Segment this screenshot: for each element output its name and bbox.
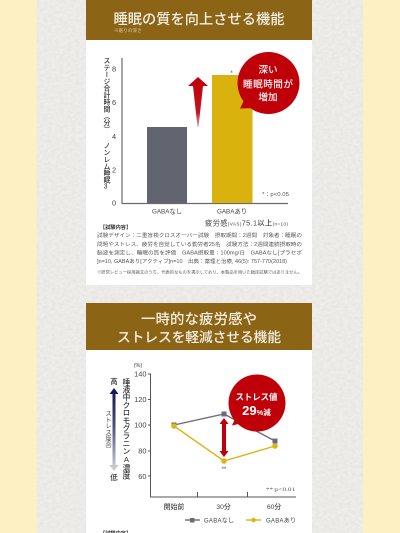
study details: 脳波を測定し、睡眠の質を評価 GABA摂取量：100mg/日 GABAなし[プラセボ xyxy=(97,250,302,256)
panel: sleep quality xyxy=(86,0,312,285)
y axis ticks: 0 xyxy=(112,198,116,208)
y axis ticks: 60 xyxy=(138,472,146,481)
y axis ticks: 6 xyxy=(112,98,116,107)
header: sleep quality xyxy=(86,0,312,40)
significance mark: * xyxy=(230,71,233,77)
significance mark: ** xyxy=(222,467,227,473)
arrow: difference xyxy=(220,418,228,457)
series: GABA xyxy=(171,423,278,464)
axes xyxy=(148,374,296,497)
header: sleep quality: ※眠りの深さ xyxy=(114,27,142,34)
y axis ticks: 100 xyxy=(134,420,146,430)
x axis labels: 60分 xyxy=(267,502,281,511)
study details: ※研究レビュー採用論文のうち、代表的なものを掲示しており、本製品を用いた臨床試験ではありません。 xyxy=(97,268,302,274)
line chart: chromogranin A xyxy=(134,363,296,524)
callout: deep sleep increase: 深い xyxy=(258,64,278,76)
callout: deep sleep increase: 睡眠時間が xyxy=(243,78,293,90)
bar: GABA none xyxy=(147,127,187,203)
significance note: *：p<0.05 xyxy=(262,192,289,198)
y axis ticks: 4 xyxy=(112,132,116,141)
y axis ticks: 80 xyxy=(138,446,146,456)
callout: stress reduction xyxy=(228,374,286,432)
y axis ticks xyxy=(134,370,146,481)
study details: 問題やストレス、疲労を自覚している勤労者25名 試験方法：2週間連続摂取時の xyxy=(97,241,302,248)
stress scale xyxy=(110,376,118,482)
header: stress and fatigue: ストレスを軽減させる機能 xyxy=(117,329,281,345)
legend: GABAあり xyxy=(266,518,296,524)
bar chart: sleep time xyxy=(112,52,300,216)
callout: deep sleep increase xyxy=(238,52,300,114)
header: stress and fatigue: 一時的な疲労感や xyxy=(141,310,257,328)
fatigue note: 疲労感(VAS)75.1以上(n=10) xyxy=(205,218,288,228)
callout: stress reduction: ストレス値 xyxy=(236,392,278,402)
x axis labels xyxy=(164,502,281,511)
panel: stress and fatigue xyxy=(86,303,312,533)
x axis labels: 開始前 xyxy=(164,502,184,511)
series: GABA none xyxy=(172,412,278,444)
arrow: stress gradient xyxy=(110,388,118,471)
label: high: 高 xyxy=(110,376,118,386)
panel background xyxy=(86,0,312,285)
label: low: 低 xyxy=(110,472,118,482)
study details: 【試験内容】 xyxy=(100,223,131,231)
y axis ticks: 8 xyxy=(112,64,116,74)
arrow: increase xyxy=(188,77,208,127)
x axis labels: GABAあり xyxy=(217,208,247,216)
study details: 試験デザイン：二重盲検クロスオーバー試験 摂取期間：2週間 対象者：睡眠の xyxy=(97,232,302,239)
significance note: **:p<0.01 xyxy=(266,487,295,493)
axes xyxy=(122,58,288,204)
header: sleep quality: 睡眠の質を向上させる機能 xyxy=(114,11,284,28)
panel background xyxy=(86,303,312,533)
x axis labels: 30分 xyxy=(216,502,231,511)
callout: stress reduction: 29%減 xyxy=(242,403,271,418)
legend xyxy=(185,518,296,524)
y axis title: chromogranin A: 唾液中クロモグラニンA濃度 xyxy=(122,378,131,479)
y axis ticks: 140 xyxy=(134,370,146,378)
x axis labels xyxy=(152,208,247,216)
header: stress and fatigue xyxy=(86,303,312,350)
legend: GABAなし xyxy=(204,518,234,524)
unit label: (%) xyxy=(134,363,142,369)
y axis ticks: 2 xyxy=(112,166,116,174)
y axis ticks xyxy=(112,64,116,208)
y axis title: non-REM sleep: ノンレム睡眠3 xyxy=(102,142,109,190)
study details xyxy=(97,223,302,274)
bar: GABA xyxy=(212,75,252,203)
y axis ticks: 120 xyxy=(134,395,146,404)
y axis title: sleep time: ステージ合計時間（分） xyxy=(102,57,109,133)
study details: ]n=10, GABAあり[アクティブ]n=10 出典：薬理と治療, 46(5): 757-770(2018) xyxy=(97,258,287,265)
x axis labels: GABAなし xyxy=(152,208,182,216)
label: stress level: ストレス度合 xyxy=(104,410,111,448)
callout: deep sleep increase: 増加 xyxy=(258,92,278,104)
